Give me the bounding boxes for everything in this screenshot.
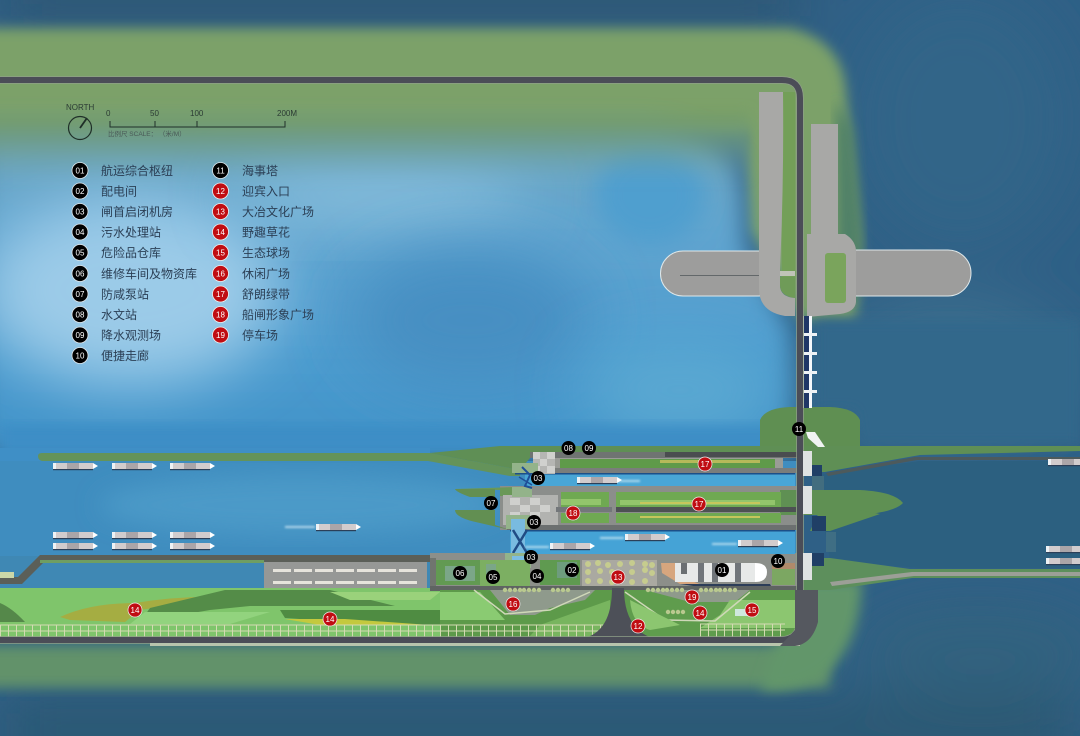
legend column 2: 生态球场 — [242, 246, 290, 260]
legend column 1: 水文站 — [101, 307, 137, 322]
legend column 1: 危险品仓库 — [101, 245, 161, 260]
north island green plots — [561, 492, 609, 507]
pump apron — [455, 487, 515, 496]
link bar — [780, 271, 795, 276]
scale bar: 50 — [150, 109, 159, 118]
land: green embankment — [0, 28, 862, 690]
legend — [72, 162, 314, 364]
north top apron — [811, 124, 838, 234]
east channel water — [815, 461, 1080, 568]
lock chamber: south — [510, 531, 795, 554]
north label: NORTH — [66, 103, 95, 112]
map markers: 13 — [614, 573, 623, 582]
legend column 2: 18 — [216, 310, 225, 320]
lock approach water — [0, 448, 800, 588]
map markers: 08 — [564, 444, 573, 453]
legend column 1: 02 — [76, 187, 85, 196]
legend column 1: 10 — [76, 352, 85, 360]
green plot — [825, 253, 846, 303]
map markers: 11 — [795, 425, 804, 434]
east water — [815, 320, 1080, 445]
north square apron — [807, 234, 856, 317]
legend column 2: 海事塔 — [242, 163, 278, 178]
legend column 2: 舒朗绿带 — [242, 286, 290, 302]
sports field — [735, 609, 753, 616]
south meadow — [0, 588, 615, 638]
north breakwater: east pill — [855, 250, 971, 296]
legend column 2: 14 — [216, 228, 225, 237]
legend column 2: 船闸形象广场 — [242, 308, 314, 322]
legend column 1: 防咸泵站 — [101, 286, 149, 302]
road widening — [780, 590, 818, 646]
lock platform — [430, 452, 903, 588]
map markers: 07 — [487, 499, 496, 508]
east dike road — [830, 572, 1080, 586]
legend column 1 — [72, 162, 197, 364]
legend column 1: 闸首启闭机房 — [101, 204, 173, 219]
legend column 2: 17 — [216, 290, 225, 299]
map markers: 10 — [774, 557, 783, 566]
compass and scale — [66, 103, 297, 140]
map markers: 03 — [530, 518, 539, 527]
map markers: 17 — [701, 460, 710, 469]
map markers: 12 — [634, 622, 643, 631]
parking yard — [264, 562, 427, 589]
legend column 1: 04 — [76, 228, 85, 237]
legend column 1: 便捷走廊 — [101, 348, 149, 363]
scale bar: 0 — [106, 109, 111, 118]
map markers: 19 — [688, 593, 697, 602]
central park road — [585, 588, 652, 643]
map markers: 09 — [585, 444, 594, 453]
map markers: 02 — [568, 566, 577, 575]
legend column 2: 15 — [216, 248, 225, 258]
legend column 1: 01 — [76, 166, 85, 176]
lock chamber: north — [525, 474, 795, 486]
north green strip — [782, 92, 795, 292]
scale bar: 200M — [277, 109, 297, 118]
compass — [68, 116, 92, 140]
ships — [53, 459, 1080, 565]
building 01 — [661, 563, 772, 592]
legend column 2: 16 — [216, 270, 225, 278]
map markers: 01 — [718, 566, 727, 575]
scale bar — [106, 109, 297, 138]
legend column 1: 配电间 — [101, 184, 137, 198]
lake north fade — [0, 112, 750, 182]
park west — [440, 590, 612, 638]
map markers: 14 — [696, 609, 705, 618]
north L apron — [759, 92, 795, 316]
legend column 1: 07 — [76, 290, 85, 299]
map markers: 06 — [456, 569, 465, 578]
legend column 2: 11 — [216, 166, 225, 176]
main road — [0, 80, 800, 646]
fence: south meadow — [0, 624, 785, 637]
legend column 1: 05 — [76, 248, 85, 258]
map markers: 18 — [569, 509, 578, 518]
legend column 2 — [212, 162, 314, 343]
west pill centre line — [680, 275, 760, 276]
plaza 13 — [582, 560, 657, 587]
ship wakes — [285, 480, 737, 548]
legend column 1: 维修车间及物资库 — [101, 266, 197, 281]
legend column 2: 13 — [216, 208, 225, 216]
legend column 2: 停车场 — [242, 328, 278, 342]
park east — [623, 590, 795, 638]
south park — [430, 586, 800, 638]
map markers: 17 — [695, 500, 704, 509]
legend column 2: 12 — [216, 187, 225, 196]
north dike land — [430, 446, 1080, 472]
lock gate: east — [803, 451, 836, 580]
map markers — [128, 422, 806, 633]
green corner — [780, 277, 795, 298]
map markers: 04 — [533, 572, 542, 581]
map markers: 15 — [748, 606, 757, 615]
building row — [430, 558, 795, 592]
legend column 2: 休闲广场 — [242, 267, 290, 281]
legend column 2: 大冶文化广场 — [242, 204, 314, 219]
legend column 1: 污水处理站 — [101, 226, 161, 240]
legend column 1: 09 — [76, 331, 85, 340]
north island — [660, 92, 971, 450]
legend column 1: 航运综合枢纽 — [101, 163, 173, 178]
lock island — [500, 486, 800, 530]
map markers: 14 — [326, 615, 335, 624]
legend column 2: 19 — [216, 331, 225, 340]
west dike: south — [0, 555, 440, 584]
legend column 1: 06 — [76, 270, 85, 278]
map markers: 03 — [527, 553, 536, 562]
spillway bridge — [802, 316, 817, 408]
legend column 1: 03 — [76, 208, 85, 216]
legend column 2: 迎宾入口 — [242, 184, 290, 198]
map markers: 03 — [534, 474, 543, 483]
legend column 2: 野趣草花 — [242, 224, 290, 240]
west dike: north — [38, 453, 520, 476]
map markers: 16 — [509, 600, 518, 609]
east dike: south — [800, 558, 1080, 590]
checker plazas — [503, 452, 558, 525]
scale bar: 100 — [190, 109, 204, 118]
map markers: 14 — [131, 606, 140, 615]
east dike road north — [826, 457, 1080, 476]
north breakwater: west pill — [660, 251, 760, 296]
lock gate: west — [505, 463, 538, 569]
scale bar: 比例尺 SCALE： （米/M） — [108, 129, 186, 138]
legend column 1: 降水观测场 — [101, 328, 161, 342]
legend column 1: 08 — [76, 310, 85, 320]
tower 11 base — [806, 432, 825, 447]
map markers: 05 — [489, 573, 498, 582]
inner lake water — [0, 125, 790, 455]
